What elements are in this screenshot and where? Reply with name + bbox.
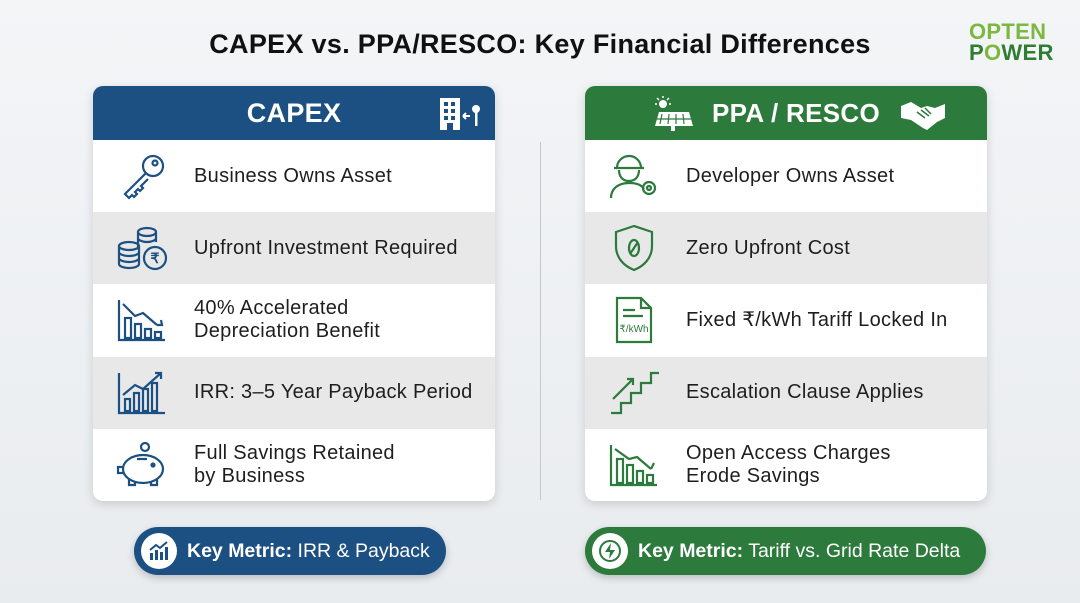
row: open access: Open Access Charges	[686, 442, 891, 464]
logo: POWER	[969, 40, 1054, 65]
row: fixed tariff: Fixed ₹/kWh Tariff Locked In	[686, 309, 948, 331]
row: depreciation: Depreciation Benefit	[194, 320, 380, 342]
row: developer owns asset: Developer Owns Asset	[686, 165, 894, 187]
row: open access	[610, 442, 891, 487]
heading: ppa resco: PPA / RESCO	[712, 98, 880, 128]
heading: capex: CAPEX	[247, 98, 341, 128]
row: savings: Full Savings Retained	[194, 442, 395, 464]
row: depreciation	[118, 297, 380, 342]
row: zero upfront: Zero Upfront Cost	[686, 237, 850, 259]
row: savings: by Business	[194, 465, 305, 487]
callout: capex key metric: Key Metric: IRR & Payback	[187, 540, 430, 562]
icon: chart	[141, 533, 177, 569]
divider	[540, 142, 541, 500]
row: irr: IRR: 3–5 Year Payback Period	[194, 381, 473, 403]
row: fixed tariff: ₹/kWh	[619, 324, 649, 335]
row: depreciation: 40% Accelerated	[194, 297, 349, 319]
row: upfront investment: ₹	[151, 250, 160, 266]
row: business owns asset	[124, 154, 392, 200]
row: escalation: Escalation Clause Applies	[686, 381, 924, 403]
row: developer owns asset	[610, 154, 894, 198]
title: CAPEX vs. PPA/RESCO: Key Financial Differences	[209, 29, 871, 59]
callout: ppa key metric	[585, 527, 986, 575]
heading: capex	[93, 86, 495, 140]
row: business owns asset: Business Owns Asset	[194, 165, 392, 187]
row: fixed tariff	[616, 296, 948, 344]
panel: capex	[93, 86, 495, 501]
row: open access: Erode Savings	[686, 465, 820, 487]
row: upfront investment: Upfront Investment Required	[194, 237, 458, 259]
heading: ppa resco	[585, 86, 987, 140]
row: upfront investment	[93, 212, 495, 284]
callout: ppa key metric: Key Metric: Tariff vs. Grid Rate Delta	[638, 540, 960, 562]
row: zero upfront	[585, 212, 987, 284]
icon: lightning	[592, 533, 628, 569]
logo: OPTEN	[969, 19, 1046, 44]
row: escalation	[585, 357, 987, 429]
row: irr	[93, 357, 495, 429]
callout: capex key metric	[134, 527, 446, 575]
logo	[969, 19, 1054, 65]
panel: ppa resco	[585, 86, 987, 501]
row: savings	[116, 442, 395, 487]
